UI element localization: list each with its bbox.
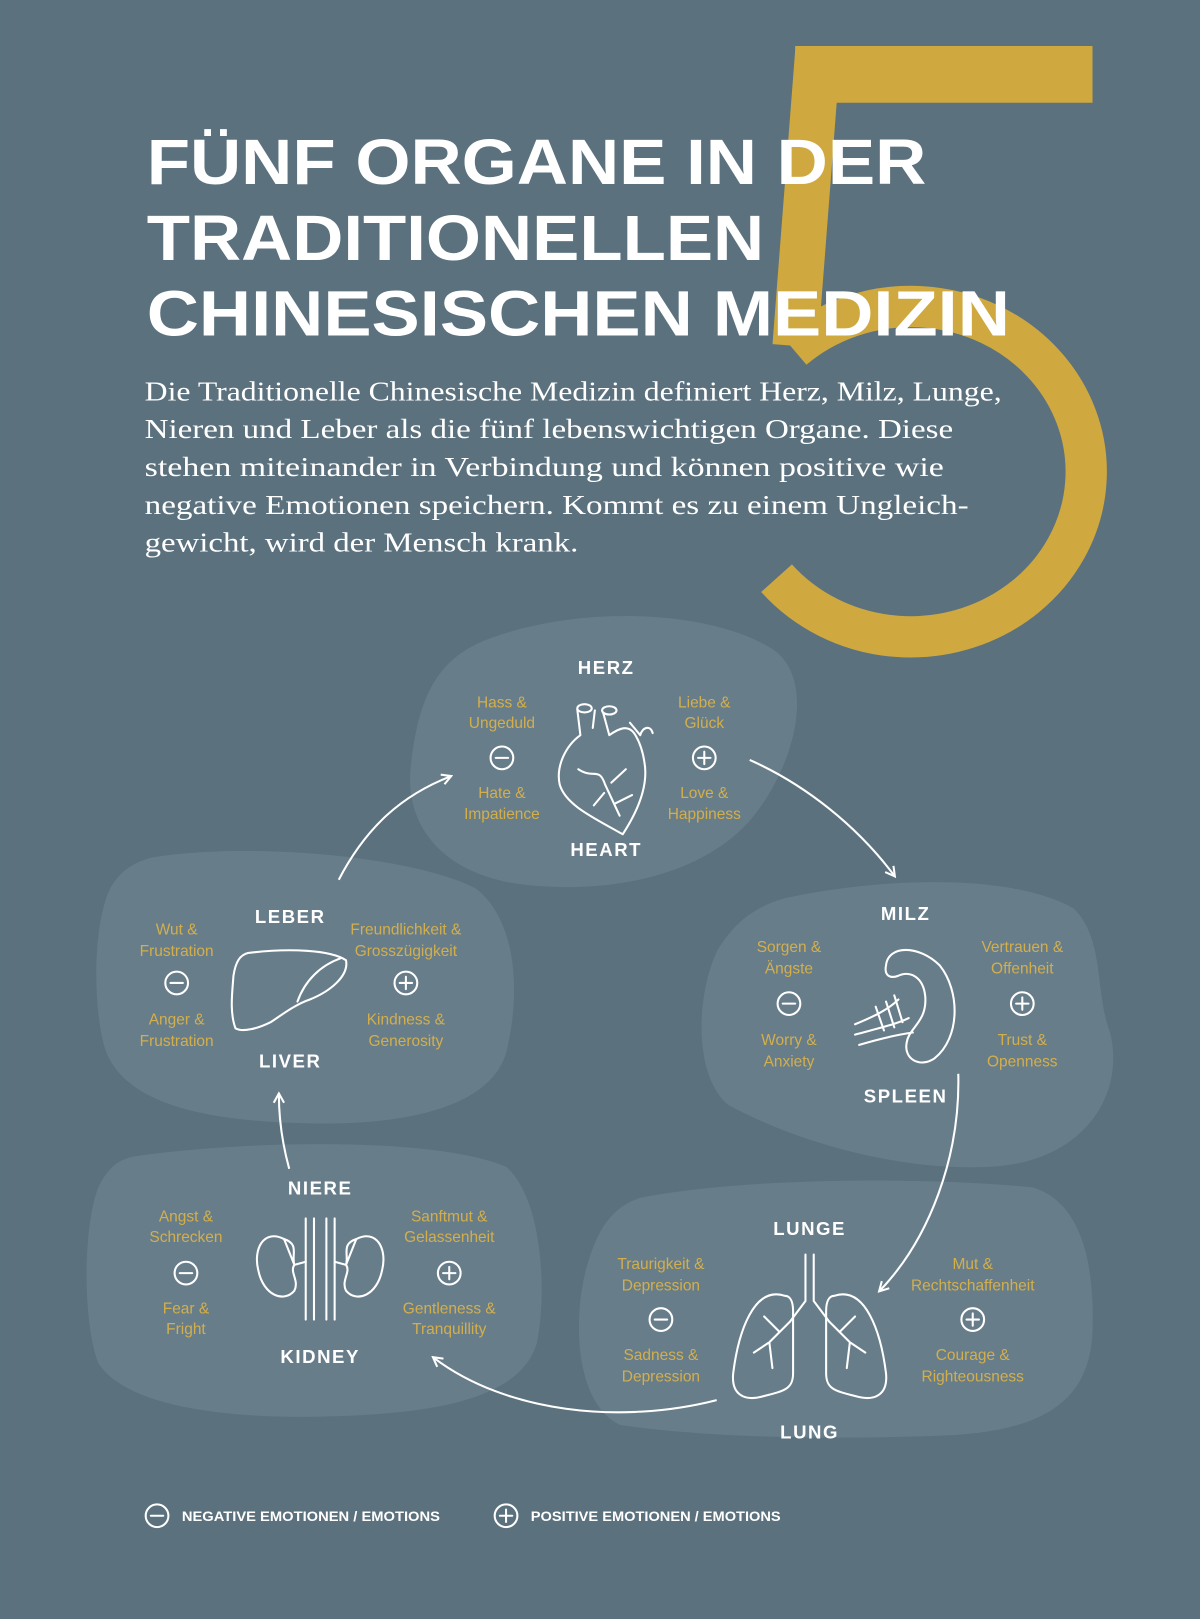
panel: heart: HERZ: [578, 657, 635, 678]
panel: heart: Hass &: [477, 694, 528, 711]
panel: spleen: Sorgen &: [757, 939, 822, 956]
panel: kidney: Gelassenheit: [404, 1229, 495, 1246]
intro paragraph: gewicht, wird der Mensch krank.: [145, 527, 578, 558]
panel: liver: LIVER: [259, 1051, 321, 1072]
icon: spleen: [855, 950, 955, 1062]
legend: POSITIVE EMOTIONEN / EMOTIONS: [531, 1509, 781, 1524]
panel: kidney: Tranquillity: [412, 1321, 487, 1338]
panel: heart: Hate &: [478, 785, 526, 802]
panel: kidney: Fear &: [163, 1300, 210, 1317]
icon: liver: [232, 950, 346, 1030]
panel: kidney: Gentleness &: [403, 1300, 496, 1317]
panel: kidney: Angst &: [159, 1208, 214, 1225]
panel: lung: Righteousness: [922, 1369, 1024, 1386]
panel: spleen: [702, 882, 1113, 1167]
big number 5: [777, 52, 1093, 637]
legend: [146, 1504, 781, 1527]
panel: lung: Traurigkeit &: [617, 1256, 705, 1273]
legend: NEGATIVE EMOTIONEN / EMOTIONS: [182, 1509, 440, 1524]
arrow: spleen to lung: [880, 1074, 958, 1291]
panel: lung: LUNGE: [773, 1218, 846, 1239]
panel: kidney: KIDNEY: [280, 1346, 360, 1367]
panel: kidney: [87, 1144, 542, 1417]
icon: heart: [559, 704, 653, 834]
arrow: lung to kidney: [434, 1358, 717, 1412]
panel: heart: Glück: [685, 715, 724, 732]
panel: liver: Wut &: [156, 921, 198, 938]
panel: liver: Anger &: [149, 1011, 205, 1028]
panel: spleen: Vertrauen &: [981, 939, 1064, 956]
arrow: kidney to liver: [279, 1094, 289, 1169]
panel: liver: LEBER: [255, 906, 326, 927]
panel: lung: LUNG: [780, 1421, 839, 1442]
panel: liver: Kindness &: [367, 1011, 446, 1028]
panel: spleen: Openness: [987, 1054, 1058, 1071]
panel: spleen: MILZ: [881, 903, 930, 924]
panel: kidney: Schrecken: [149, 1229, 223, 1246]
panel: heart: HEART: [570, 839, 642, 860]
panel: heart: Impatience: [464, 806, 540, 823]
panel: spleen: Ängste: [765, 961, 813, 978]
icon: lungs: [733, 1255, 886, 1398]
panel: heart: Liebe &: [678, 694, 731, 711]
panel: lung: [579, 1181, 1093, 1442]
panel: kidney: Sanftmut &: [411, 1208, 488, 1225]
panel: spleen: Offenheit: [991, 961, 1054, 978]
panel: kidney: Fright: [166, 1321, 206, 1338]
panel: spleen: SPLEEN: [864, 1086, 947, 1107]
title: TRADITIONELLEN: [147, 202, 764, 274]
icon: kidneys: [257, 1218, 383, 1320]
panel: liver: Frustration: [140, 1033, 214, 1050]
panel: kidney: NIERE: [288, 1178, 352, 1199]
panel: liver: Frustration: [140, 943, 214, 960]
panel: lung: Rechtschaffenheit: [911, 1278, 1035, 1295]
panel: heart: Love &: [680, 785, 729, 802]
panel: heart: [410, 616, 797, 887]
arrow: heart to spleen: [750, 760, 894, 876]
intro paragraph: Nieren und Leber als die fünf lebenswichtigen Organe. Diese: [145, 414, 953, 445]
panel: heart: Happiness: [668, 806, 741, 823]
panel: heart: Ungeduld: [469, 715, 535, 732]
panel: liver: Generosity: [368, 1033, 444, 1050]
panel: lung: Depression: [622, 1278, 700, 1295]
title: CHINESISCHEN MEDIZIN: [147, 278, 1010, 350]
intro paragraph: negative Emotionen speichern. Kommt es zu einem Ungleich-: [145, 490, 969, 521]
intro paragraph: [145, 377, 1002, 558]
intro paragraph: stehen miteinander in Verbindung und können positive wie: [145, 452, 944, 483]
panel: liver: [96, 851, 514, 1124]
panel: lung: Depression: [622, 1369, 700, 1386]
panel: spleen: Trust &: [998, 1032, 1048, 1049]
intro paragraph: Die Traditionelle Chinesische Medizin definiert Herz, Milz, Lunge,: [145, 377, 1002, 408]
panel: lung: Sadness &: [624, 1347, 699, 1364]
panel: lung: Courage &: [936, 1347, 1010, 1364]
title: [147, 126, 1010, 350]
arrow: liver to heart: [339, 776, 450, 880]
panel: liver: Freundlichkeit &: [350, 921, 462, 938]
panel: spleen: Worry &: [761, 1032, 817, 1049]
panel: spleen: Anxiety: [764, 1054, 815, 1071]
panel: lung: Mut &: [953, 1256, 994, 1273]
panel: liver: Grosszügigkeit: [355, 943, 458, 960]
title: FÜNF ORGANE IN DER: [147, 126, 926, 198]
